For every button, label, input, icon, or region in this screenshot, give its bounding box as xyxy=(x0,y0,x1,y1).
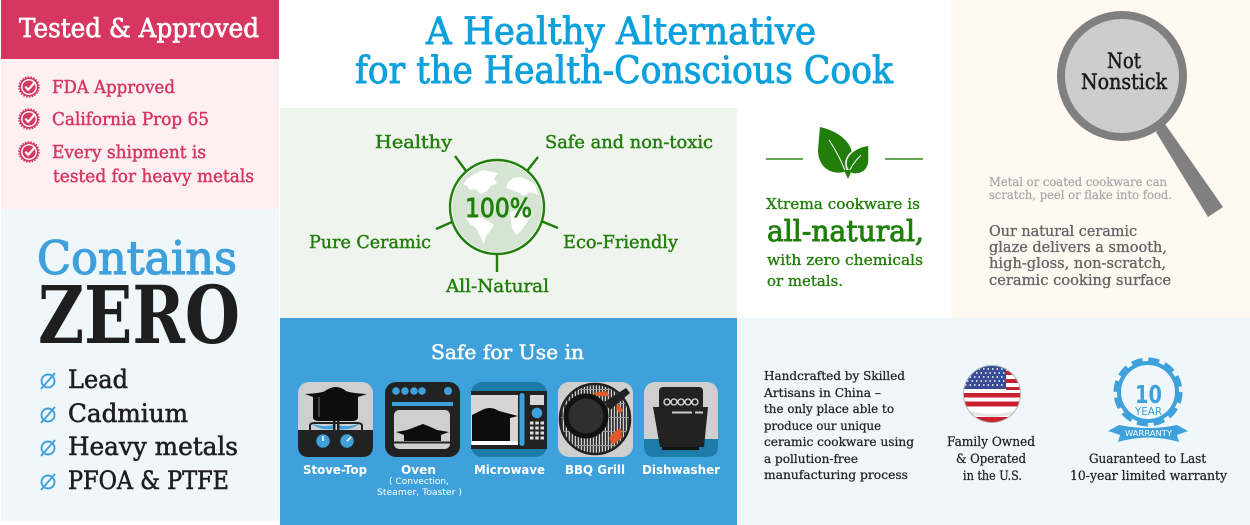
icon: magnifying glass xyxy=(1061,15,1223,217)
text: all natural: with zero chemicals xyxy=(767,251,923,269)
icon: dishwasher xyxy=(644,382,718,457)
icon: check badge 1 xyxy=(20,78,38,96)
text: ceramic glaze: glaze delivers a smooth, xyxy=(989,238,1167,256)
text: handcrafted: produce our unique xyxy=(764,418,881,433)
labels: properties xyxy=(309,132,713,297)
labels: appliances xyxy=(303,463,720,477)
labels: appliances: Dishwasher xyxy=(642,463,720,477)
title xyxy=(355,10,894,92)
text: family owned: Family Owned xyxy=(947,435,1035,450)
labels: appliances: Oven xyxy=(401,463,436,477)
text: ceramic glaze: ceramic cooking surface xyxy=(989,271,1171,289)
panel: tested and approved xyxy=(1,0,279,209)
globe xyxy=(436,156,558,272)
text: every shipment tested: tested for heavy metals xyxy=(53,166,254,187)
panel: safe for use in xyxy=(280,318,737,525)
text: all natural: or metals. xyxy=(767,272,843,290)
icon: check badge 2 xyxy=(20,110,38,128)
label: oven detail xyxy=(377,477,462,498)
text: coated cookware warning: Metal or coated cookware can xyxy=(989,175,1167,189)
labels: properties: Healthy xyxy=(375,132,453,153)
title: for the Health-Conscious Cook xyxy=(355,49,894,92)
heading: safe for use in: Safe for Use in xyxy=(431,340,584,364)
text: all natural: all-natural, xyxy=(767,214,924,248)
text: guarantee xyxy=(1070,452,1228,484)
text: guarantee: 10-year limited warranty xyxy=(1070,469,1228,484)
list: contaminants xyxy=(41,365,238,495)
text: handcrafted: the only place able to xyxy=(764,401,894,416)
text: guarantee: Guaranteed to Last xyxy=(1089,452,1207,467)
panel: not nonstick xyxy=(951,0,1250,318)
labels: properties: All-Natural xyxy=(445,276,549,297)
labels: properties: Safe and non-toxic xyxy=(545,132,713,153)
labels: properties: Eco-Friendly xyxy=(563,232,679,253)
icon: leaves xyxy=(766,127,923,179)
list: contaminants: Cadmium xyxy=(68,399,188,428)
icon: bbq grill xyxy=(558,382,633,457)
labels: appliances: Microwave xyxy=(474,463,545,477)
text: California Prop 65: California Prop 65 xyxy=(52,109,209,130)
icon: warranty badge: WARRANTY xyxy=(1125,429,1172,438)
heading bar: tested and approved xyxy=(1,0,279,59)
label: oven detail: ( Convection, xyxy=(389,477,449,487)
panel: origin and warranty xyxy=(738,318,1250,525)
icon: warranty badge: YEAR xyxy=(1134,405,1162,418)
panel: contains zero xyxy=(1,209,279,521)
text: handcrafted: Handcrafted by Skilled xyxy=(764,368,905,383)
text: coated cookware warning: scratch, peel or flake into food. xyxy=(989,188,1172,202)
text: all natural xyxy=(766,195,924,290)
text: coated cookware warning xyxy=(989,175,1172,202)
labels: appliances: Stove-Top xyxy=(303,463,367,477)
text: every shipment tested: Every shipment is xyxy=(52,142,206,163)
text: handcrafted: ceramic cookware using xyxy=(764,434,914,449)
text: family owned: in the U.S. xyxy=(963,469,1022,484)
heading: zero: ZERO xyxy=(38,268,240,362)
icon: magnifying glass: Nonstick xyxy=(1081,70,1167,94)
text: every shipment tested xyxy=(52,142,254,187)
heading bar: tested and approved: Tested & Approved xyxy=(19,14,259,44)
panel: 100 percent xyxy=(280,108,737,318)
labels: appliances: BBQ Grill xyxy=(565,463,625,477)
icon: warranty badge: 10 xyxy=(1135,380,1162,409)
text: ceramic glaze xyxy=(989,222,1171,289)
icon: microwave xyxy=(471,382,547,457)
text: ceramic glaze: high-gloss, non-scratch, xyxy=(989,254,1166,272)
text: handcrafted: a pollution-free xyxy=(764,451,858,466)
text: FDA approved: FDA Approved xyxy=(52,77,175,98)
label: oven detail: Steamer, Toaster ) xyxy=(377,488,462,498)
icon: oven xyxy=(385,382,460,457)
icon: us flag xyxy=(963,365,1022,424)
list: contaminants: PFOA & PTFE xyxy=(68,466,229,495)
heading: contains: Contains xyxy=(37,231,237,285)
text: handcrafted: manufacturing process xyxy=(764,467,908,482)
icon: warranty badge xyxy=(1108,360,1188,442)
globe: 100% xyxy=(465,194,532,224)
labels: properties: Pure Ceramic xyxy=(309,232,431,253)
icon: magnifying glass: Not xyxy=(1107,49,1141,73)
list: contaminants: Lead xyxy=(68,365,128,394)
panel: all natural xyxy=(766,127,924,290)
text: family owned xyxy=(947,435,1035,484)
text: family owned: & Operated xyxy=(956,452,1026,467)
icon: check badge 3 xyxy=(20,142,38,162)
text: all natural: Xtrema cookware is xyxy=(766,195,920,213)
text: handcrafted: Artisans in China – xyxy=(763,385,881,400)
text: handcrafted xyxy=(763,368,914,482)
list: contaminants: Heavy metals xyxy=(68,432,238,461)
icon: stove-top xyxy=(298,382,373,457)
text: ceramic glaze: Our natural ceramic xyxy=(989,222,1137,240)
title: A Healthy Alternative xyxy=(425,10,816,53)
